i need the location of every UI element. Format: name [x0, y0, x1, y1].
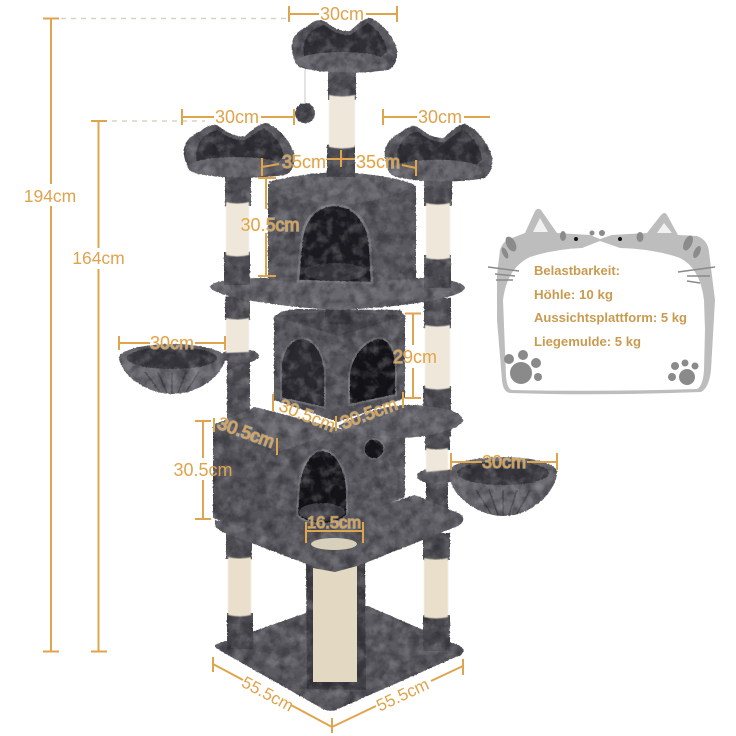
dimension: right basket 30cm: 30cm [482, 452, 526, 472]
left basket pleats [145, 372, 199, 394]
left perch [184, 123, 295, 178]
dimension: 164cm: 164cm [72, 248, 125, 268]
sisal post sections [226, 95, 450, 618]
middle left door [281, 338, 325, 408]
dimension: top perch 30cm: 30cm [320, 4, 364, 24]
dimension: 29cm [393, 314, 437, 398]
right basket bowl [449, 475, 557, 516]
cat ear inners [533, 218, 672, 233]
lower house top [213, 407, 345, 452]
dimension: 35cm left and right [262, 150, 416, 176]
dimension: left perch 30cm [182, 107, 294, 127]
lower house right face [277, 428, 405, 540]
dimension: base 55.5cm right: 55.5cm [373, 675, 432, 715]
dimension: base 55.5cm left [213, 657, 332, 733]
middle house [274, 309, 405, 422]
hanging ball [295, 103, 315, 123]
dimension: left basket 30cm: 30cm [150, 333, 194, 353]
left basket bowl [119, 358, 226, 394]
load capacity text [534, 263, 687, 349]
base platform [215, 606, 464, 711]
panel: cat load capacity card [488, 209, 715, 394]
lower platform [215, 495, 463, 572]
dimension: upper house 30.5cm: 30.5cm [240, 215, 300, 235]
dimension: right perch 30cm: 30cm [418, 107, 462, 127]
right paw [668, 360, 698, 385]
lower door floor [299, 503, 345, 521]
dimension: 16.5cm [306, 514, 363, 543]
card outline [497, 209, 715, 394]
upper house door [298, 205, 372, 283]
dimension: right perch 30cm [383, 107, 490, 127]
load capacity text: Aussichtsplattform: 5 kg [534, 310, 687, 325]
cat whiskers [488, 267, 715, 283]
dimension: 35cm left and right: 35cm [356, 152, 400, 172]
upper house [268, 172, 416, 283]
dimension: base 55.5cm left: 55.5cm [239, 673, 297, 716]
lower house left face [213, 425, 277, 540]
ramp frame [306, 560, 366, 690]
right basket hollow [457, 461, 549, 485]
middle house stub [325, 308, 350, 324]
left paw [504, 350, 542, 384]
dimension: 16.5cm: 16.5cm [307, 514, 361, 532]
lower house round hole [364, 439, 384, 459]
dimension: 164cm [72, 121, 125, 652]
right basket inside [449, 457, 557, 487]
load capacity text: Liegemulde: 5 kg [534, 334, 641, 349]
dimension: 194cm [24, 18, 76, 652]
left basket inside [119, 344, 225, 372]
dimension: upper house 30.5cm [240, 178, 300, 276]
middle right door [349, 338, 396, 405]
dimension: lower house depth: 30.5cm [215, 413, 277, 452]
left basket hollow [127, 347, 217, 369]
dimension: 194cm: 194cm [24, 186, 76, 206]
dimension: lower house height: 30.5cm [173, 460, 233, 480]
right basket pleats [476, 490, 530, 516]
ball string [304, 70, 306, 104]
cat stripes [500, 230, 702, 259]
right basket arm [417, 468, 457, 484]
right perch [385, 124, 492, 182]
upper house top [268, 172, 415, 205]
upper door floor [304, 263, 366, 281]
base post stubs [227, 615, 450, 651]
platform scratch hole [311, 538, 357, 550]
cat eyes [574, 237, 622, 241]
load capacity text: Belastbarkeit: [534, 263, 620, 278]
left basket arm [221, 349, 259, 363]
upper posts [224, 70, 452, 651]
load capacity text: Höhle: 10 kg [534, 287, 613, 302]
dimension: lower house height [173, 421, 233, 519]
dimension: left basket 30cm [119, 333, 225, 353]
dimension: base 55.5cm right [332, 659, 463, 727]
dashed height guides [61, 18, 288, 121]
dimension: middle house width right: 30.5cm [338, 394, 400, 433]
dimension: middle house width left: 30.5cm [276, 395, 338, 436]
dimension: 35cm left and right: 35cm [282, 152, 326, 172]
cat tree [119, 18, 557, 711]
dimension: right basket 30cm [451, 452, 557, 472]
lower house door [297, 450, 347, 524]
middle house top [274, 311, 405, 336]
dimension: top perch 30cm [289, 4, 397, 24]
dimension: left perch 30cm: 30cm [215, 107, 259, 127]
sisal ramp [313, 566, 357, 682]
top perch [292, 18, 397, 73]
post stubs over upper platform [224, 147, 451, 288]
dimension: 29cm: 29cm [393, 347, 437, 367]
upper platform [210, 278, 465, 310]
card white interior [503, 241, 705, 391]
middle platform [338, 405, 463, 438]
